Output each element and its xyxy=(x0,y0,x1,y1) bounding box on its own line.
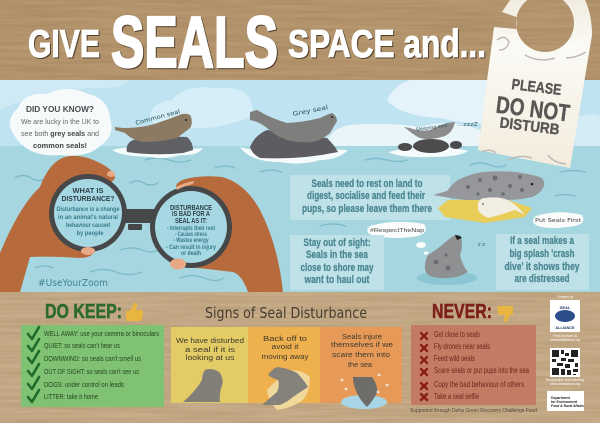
title: SEALS xyxy=(111,3,278,83)
title xyxy=(28,3,486,83)
logo: defra: for Environment xyxy=(551,400,578,404)
panel: crash dive: are distressed xyxy=(514,273,570,285)
binoculars xyxy=(49,174,232,268)
disturbance is bad text: DISTURBANCE xyxy=(170,203,212,212)
grey seal on rock xyxy=(240,104,348,164)
panel: crash dive: big splash 'crash xyxy=(510,248,575,260)
put seals first bubble: Put Seals First xyxy=(535,218,581,224)
panel: do keep list: QUIET: so seals can't hear us xyxy=(44,341,120,350)
disturbance is bad text: - Wastes energy xyxy=(174,237,209,244)
respect the nap bubble: #RespectTheNap xyxy=(370,228,424,234)
panel: injure themselves: the sea xyxy=(348,362,372,369)
scene: sky and sea xyxy=(0,80,600,292)
panel: looking at us: a seal if it is xyxy=(185,347,236,354)
disturbance is bad text: IS BAD FOR A xyxy=(172,209,210,218)
signs heading: Signs of Seal Disturbance xyxy=(205,304,367,322)
qr code: Responsible seal watching xyxy=(546,378,584,382)
panel: do keep list: LITTER: take it home xyxy=(44,392,98,401)
panel: moving away: Back off to xyxy=(263,336,307,343)
illustration: seal and pup on sand xyxy=(433,171,544,223)
panel: crash dive: dive' it shows they xyxy=(504,261,580,273)
door hanger xyxy=(478,0,592,168)
panel: do keep list: WELL AWAY: use your camera or binoculars xyxy=(44,329,159,338)
disturbance is bad text: or death xyxy=(181,250,201,257)
panel: do keep list xyxy=(21,325,164,407)
panel: never list: Scare seals or put pups into the sea xyxy=(434,366,529,375)
sleeping seal on rocks: Sleeping seal xyxy=(415,123,448,133)
disturbance is bad text: - Causes stress xyxy=(175,231,207,238)
panel: looking at us: looking at us xyxy=(186,355,235,362)
supported by note: Supported through Defra Green Recovery Challenge Fund xyxy=(410,408,537,414)
panel: never list: Take a seal selfie xyxy=(434,392,479,401)
did you know cloud xyxy=(10,89,112,156)
panel: do keep list: OUT OF SIGHT: so seals can't see us xyxy=(44,367,139,376)
what is disturbance text: Disturbance is a change xyxy=(56,206,120,213)
thumb and finger details xyxy=(81,171,194,270)
did you know cloud: see both grey seals and xyxy=(21,129,99,138)
illustration: seal in water xyxy=(417,235,485,285)
what is disturbance text: in an animal's natural xyxy=(58,214,118,221)
what is disturbance text: WHAT IS xyxy=(72,186,104,195)
top wood background xyxy=(0,0,600,80)
qr code: www.sealalliance.org xyxy=(550,382,580,386)
panel: injure themselves xyxy=(320,327,402,409)
what is disturbance text: by people xyxy=(76,230,104,237)
panel: moving away: avoid it xyxy=(272,344,299,351)
sleeping seal on rocks: ...zzzZ xyxy=(457,122,479,128)
panel: never list: Fly drones near seals xyxy=(434,342,490,351)
right hand holding binoculars xyxy=(171,176,283,292)
panel: looking at us xyxy=(171,327,248,403)
panel: stay out of sight: Seals in the sea xyxy=(306,249,369,261)
what is disturbance text: DISTURBANCE? xyxy=(62,194,115,203)
panel: never list: Copy the bad behaviour of others xyxy=(434,380,524,389)
qr code xyxy=(546,348,584,386)
icon: thumbs up xyxy=(126,303,143,321)
did you know cloud: We are lucky in the UK to xyxy=(21,117,99,126)
common seal on rock: Common seal xyxy=(135,108,181,127)
logo: defra xyxy=(547,391,584,411)
what is disturbance text xyxy=(56,186,120,237)
respect the nap bubble xyxy=(367,222,428,255)
did you know cloud: common seals! xyxy=(33,141,87,150)
panel: looking at us: We have disturbed xyxy=(176,338,244,345)
panel: stay out of sight: want to haul out xyxy=(304,274,370,286)
logo: seal alliance xyxy=(550,295,580,342)
do keep heading: DO KEEP: xyxy=(45,301,122,323)
disturbance is bad text: SEAL AS IT: xyxy=(175,216,207,225)
logo: seal alliance: ALLIANCE xyxy=(555,326,575,330)
panel: do keep list: DOWNWIND: so seals can't smell us xyxy=(44,354,141,363)
common seal on rock xyxy=(112,108,203,158)
left hand holding binoculars xyxy=(0,156,115,292)
door hanger: DO NOT xyxy=(495,92,572,127)
title: GIVE xyxy=(28,23,100,66)
logo: defra: Department xyxy=(551,396,571,400)
bottom wood background xyxy=(0,292,600,423)
panel: never list xyxy=(411,325,536,405)
never heading: NEVER: xyxy=(432,301,492,323)
title: SPACE and... xyxy=(288,23,486,66)
disturbance is bad text xyxy=(166,203,216,257)
panel: injure themselves: scare them into xyxy=(332,352,390,359)
logo: seal alliance: www.sealalliance.org xyxy=(550,338,580,342)
panel: seals need to rest: pups, so please leave them there xyxy=(302,203,432,215)
panel: never list: Get close to seals xyxy=(434,330,480,339)
panel: moving away: moving away xyxy=(262,354,309,361)
what is disturbance text: behaviour caused xyxy=(66,222,110,229)
panel: injure themselves: themselves if we xyxy=(331,342,393,349)
door hanger: DISTURB xyxy=(499,114,561,139)
did you know cloud: DID YOU KNOW? xyxy=(26,104,94,114)
panel: seals need to rest: digest, socialise and feed their xyxy=(307,190,426,202)
panel: never list: Feed wild seals xyxy=(434,354,475,363)
panel: seals need to rest xyxy=(290,175,450,220)
logo: defra: Food & Rural Affairs xyxy=(551,404,584,408)
put seals first bubble xyxy=(533,212,583,228)
panel: crash dive xyxy=(496,234,589,290)
illustration: seal in water: z z xyxy=(478,242,485,248)
hashtag use your zoom: #UseYourZoom xyxy=(38,278,108,289)
panel: stay out of sight xyxy=(290,235,384,290)
panel: crash dive: If a seal makes a xyxy=(510,235,575,247)
grey seal on rock: Grey seal xyxy=(292,104,329,118)
panel: moving away xyxy=(248,327,320,410)
disturbance is bad text: - Can result in injury xyxy=(166,244,216,251)
disturbance is bad text: - Interrupts their rest xyxy=(167,225,216,232)
sleeping seal on rocks xyxy=(388,122,479,157)
panel: stay out of sight: Stay out of sight: xyxy=(304,237,370,249)
door hanger: PLEASE xyxy=(511,76,562,99)
logo: seal alliance: Created by xyxy=(556,295,574,299)
panel: seals need to rest: Seals need to rest on land to xyxy=(312,178,423,190)
logo: seal alliance: Find out more at xyxy=(553,334,577,338)
panel: stay out of sight: close to shore may xyxy=(300,262,374,274)
logo: seal alliance: SEAL xyxy=(560,305,571,310)
panel: injure themselves: Seals injure xyxy=(342,334,382,341)
icon: thumbs down xyxy=(498,306,513,322)
panel: do keep list: DOGS: under control on leads xyxy=(44,380,124,389)
